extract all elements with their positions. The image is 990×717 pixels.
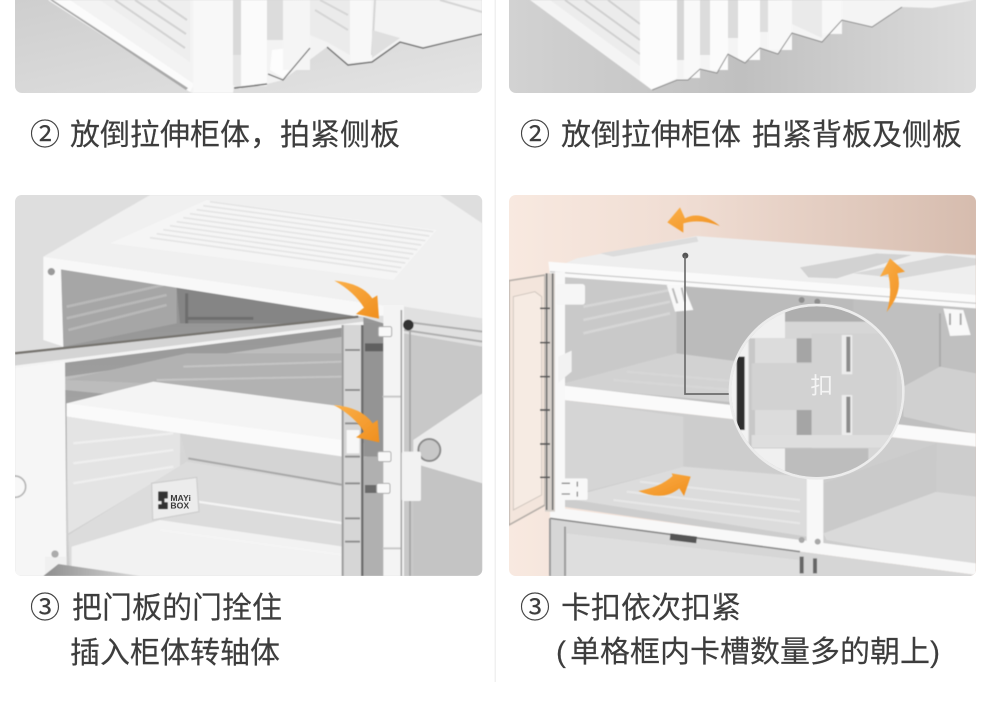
upper cell <box>616 286 976 432</box>
caption: step 3 right: 单格框内卡槽数量多的朝上 <box>570 636 930 669</box>
caption: step 3 right <box>520 592 940 669</box>
arrow: upper hinge <box>334 281 379 319</box>
right cell with door <box>404 323 482 576</box>
open door left <box>509 275 545 525</box>
cabinet front edge <box>43 257 402 347</box>
callout: magnified clip detail <box>730 305 903 478</box>
panel: step 3 photo left, door hinge insertion <box>4 195 482 576</box>
icon: MAYi BOX logo badge: MAYi <box>170 493 191 503</box>
top lid <box>568 236 976 296</box>
translucent door top <box>15 317 363 368</box>
caption: step 3 left: ③ <box>30 592 60 625</box>
caption: step 3 right: ) <box>930 636 940 669</box>
caption: step 3 left: 把门板的门拴住 <box>72 592 282 625</box>
bottom row doors <box>550 518 976 578</box>
panel: step 3 photo right, clips fastening <box>509 195 976 578</box>
dark gap beside door <box>363 352 384 458</box>
caption: step 2 right: ② <box>520 119 550 152</box>
panel: step 2 photo left, folded cabinet <box>15 0 482 93</box>
caption: step 2 left: 放倒拉伸柜体，拍紧侧板 <box>70 119 400 152</box>
callout: magnified clip detail: 扣 <box>810 372 833 398</box>
caption: step 2 left: ② <box>30 119 60 152</box>
left door plate <box>15 362 67 576</box>
callout: pointer line to magnifier <box>682 253 733 394</box>
caption: step 3 left <box>30 592 282 670</box>
caption: step 3 right: 卡扣依次扣紧 <box>561 592 741 625</box>
lower cell <box>564 402 976 552</box>
caption: step 2 right: 拍紧背板及侧板 <box>752 119 962 152</box>
arrow: right lid <box>880 258 905 312</box>
arrow: top lid <box>667 207 720 233</box>
icon: MAYi BOX logo badge: BOX <box>170 500 189 510</box>
caption: step 3 left: 插入柜体转轴体 <box>70 637 280 670</box>
caption: step 3 right: ③ <box>520 592 550 625</box>
caption: step 3 right: ( <box>556 636 566 669</box>
arrow: bottom clip <box>638 473 691 496</box>
caption: step 2 right: 放倒拉伸柜体 <box>561 119 741 152</box>
arrow: lower hinge <box>334 405 379 442</box>
caption: step 2 right <box>520 119 962 152</box>
divider between columns <box>494 0 496 682</box>
upper cell <box>61 269 383 576</box>
upper cell lower glass <box>65 336 342 394</box>
cabinet top <box>43 195 482 323</box>
lower cell <box>66 434 342 566</box>
center post <box>383 305 404 576</box>
frame beams <box>548 262 976 308</box>
door glass strip <box>343 324 362 576</box>
middle shelf <box>66 381 342 440</box>
icon: MAYi BOX logo badge <box>152 477 199 520</box>
panel: step 2 photo right, folded cabinet <box>509 0 976 93</box>
clips <box>564 284 586 305</box>
